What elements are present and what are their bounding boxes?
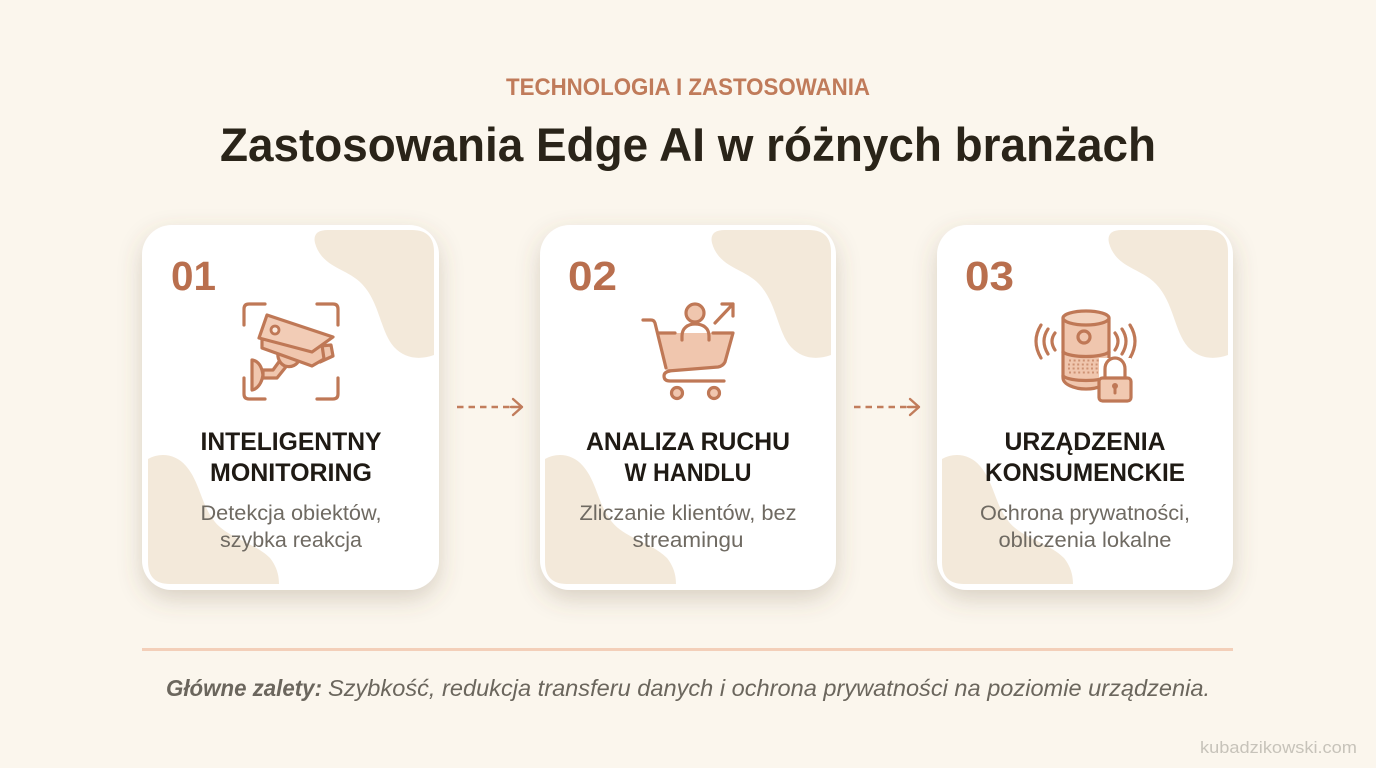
- panel: card 01: [142, 225, 439, 590]
- heading: [586, 428, 790, 487]
- icon: security camera: [244, 304, 338, 399]
- arrow: card 2 to card 3: [854, 399, 919, 415]
- description: Detekcja obiektów,: [200, 501, 382, 525]
- panel: card 03: 03: [965, 253, 1014, 299]
- heading: [985, 428, 1185, 487]
- description: Ochrona prywatności,: [980, 501, 1190, 525]
- title: Zastosowania Edge AI w różnych branżach: [220, 118, 1156, 171]
- eyebrow heading: TECHNOLOGIA I ZASTOSOWANIA: [506, 74, 870, 101]
- panel: card 02: 02: [568, 253, 617, 299]
- description: szybka reakcja: [220, 528, 362, 552]
- description: [580, 501, 796, 552]
- icon: smart speaker with lock: [1036, 311, 1135, 401]
- heading: KONSUMENCKIE: [985, 459, 1185, 487]
- heading: ANALIZA RUCHU: [586, 428, 790, 456]
- description: obliczenia lokalne: [998, 528, 1172, 552]
- panel: card 02: [540, 225, 836, 590]
- description: [980, 501, 1190, 552]
- description: [200, 501, 382, 552]
- panel: card 01: 01: [171, 253, 216, 299]
- panel: card 03: [937, 225, 1233, 590]
- heading: W HANDLU: [624, 459, 752, 487]
- description: Zliczanie klientów, bez: [580, 501, 796, 525]
- footer note: Główne zalety:: [166, 675, 322, 701]
- icon: shopping cart with person: [643, 304, 733, 398]
- heading: [200, 428, 382, 487]
- footer note: Szybkość, redukcja transferu danych i ochrona prywatności na poziomie urządzenia.: [328, 675, 1210, 701]
- arrow: card 1 to card 2: [457, 399, 522, 415]
- heading: URZĄDZENIA: [1004, 428, 1166, 456]
- watermark: kubadzikowski.com: [1200, 738, 1357, 757]
- description: streamingu: [632, 528, 744, 552]
- heading: INTELIGENTNY: [200, 428, 382, 456]
- heading: MONITORING: [210, 459, 372, 487]
